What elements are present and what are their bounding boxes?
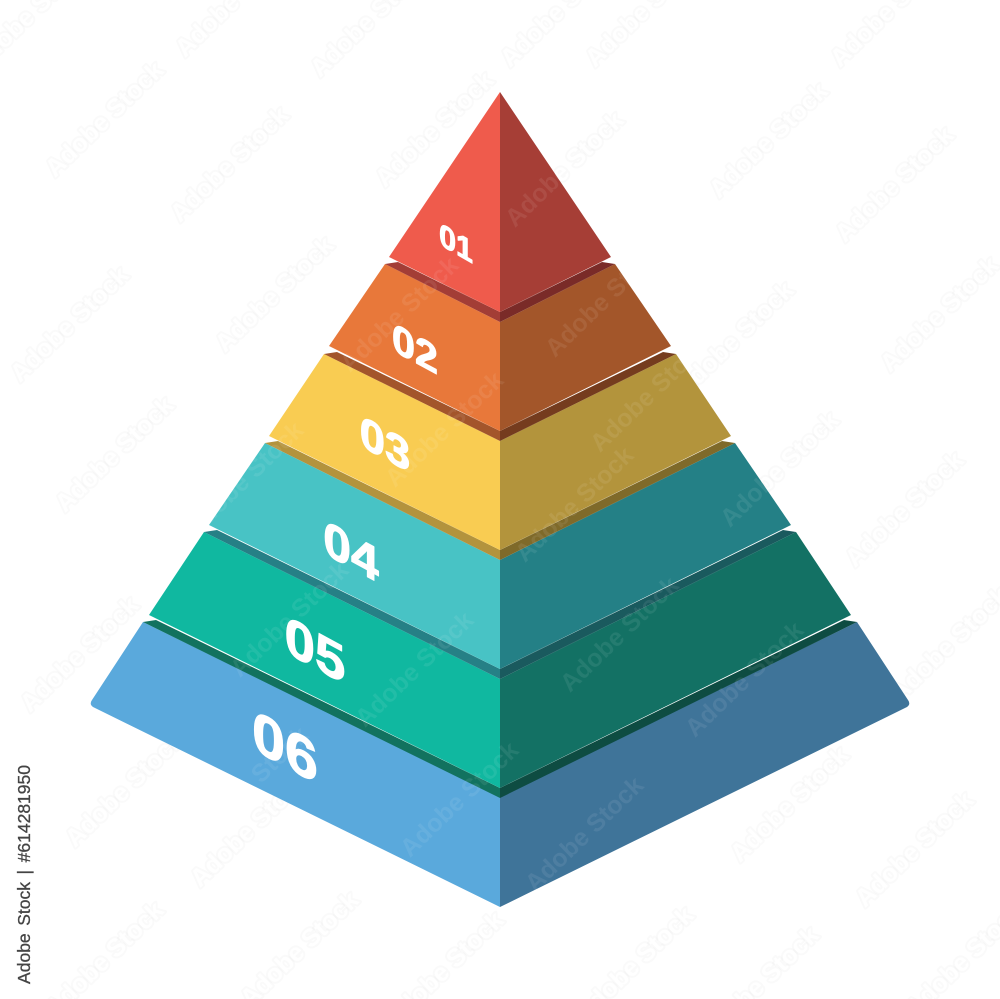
watermark: over pyramid: Adobe Stock	[585, 331, 714, 457]
stock id label: Adobe Stock | #614281950	[14, 765, 34, 984]
layer 02: orange	[329, 262, 671, 431]
watermark: background: Adobe Stock	[5, 261, 134, 387]
watermark: over pyramid: Adobe Stock	[510, 441, 639, 567]
number 06: 06	[252, 697, 318, 797]
watermark: background: Adobe Stock	[60, 726, 189, 852]
watermark: over pyramid: Adobe Stock	[225, 556, 354, 682]
watermark: over pyramid: Adobe Stock	[370, 66, 499, 192]
watermark: over pyramid: Adobe Stock	[500, 106, 629, 232]
watermark: background: Adobe Stock	[185, 766, 314, 892]
watermark: over pyramid: Adobe Stock	[540, 236, 669, 362]
watermark: over pyramid: Adobe Stock	[180, 416, 309, 542]
watermark: over pyramid: Adobe Stock	[555, 571, 684, 697]
layer 04: teal	[209, 441, 791, 669]
watermark: background: Adobe Stock	[704, 77, 833, 203]
watermark: background: Adobe Stock	[165, 101, 294, 227]
number 05: 05	[285, 605, 345, 696]
number 04: 04	[323, 510, 379, 594]
layer 05: green	[149, 530, 851, 788]
watermark: over pyramid: Adobe Stock	[395, 736, 524, 862]
watermark: background: Adobe Stock	[210, 231, 339, 357]
watermark: background: Adobe Stock	[370, 66, 499, 192]
watermark: background: Adobe Stock	[830, 121, 959, 247]
number 01: 01	[439, 217, 473, 271]
number 02: 02	[392, 314, 438, 384]
watermark: background: Adobe Stock	[40, 56, 169, 182]
watermark: background: Adobe Stock	[670, 276, 799, 402]
watermark: over pyramid: Adobe Stock	[350, 606, 479, 732]
watermark: background: Adobe Stock	[500, 106, 629, 232]
watermark: background: Adobe Stock	[15, 591, 144, 717]
watermark: over pyramid	[180, 66, 844, 897]
watermark: over pyramid: Adobe Stock	[380, 366, 509, 492]
watermark: background: Adobe Stock	[840, 446, 969, 572]
watermark: background: Adobe Stock	[850, 786, 979, 912]
layer 03: yellow	[269, 352, 731, 550]
layer 01: red	[389, 92, 611, 312]
watermark: over pyramid: Adobe Stock	[680, 616, 809, 742]
watermark: over pyramid: Adobe Stock	[520, 771, 649, 897]
pyramid	[91, 92, 909, 907]
number 03: 03	[360, 406, 410, 483]
layer 06: blue	[91, 620, 909, 907]
watermark: background: Adobe Stock	[715, 406, 844, 532]
watermark: over pyramid: Adobe Stock	[185, 721, 314, 847]
watermark: over pyramid: Adobe Stock	[715, 406, 844, 532]
watermark: background: Adobe Stock	[50, 391, 179, 517]
watermark: background: Adobe Stock	[725, 741, 854, 867]
watermark: over pyramid: Adobe Stock	[335, 251, 464, 377]
